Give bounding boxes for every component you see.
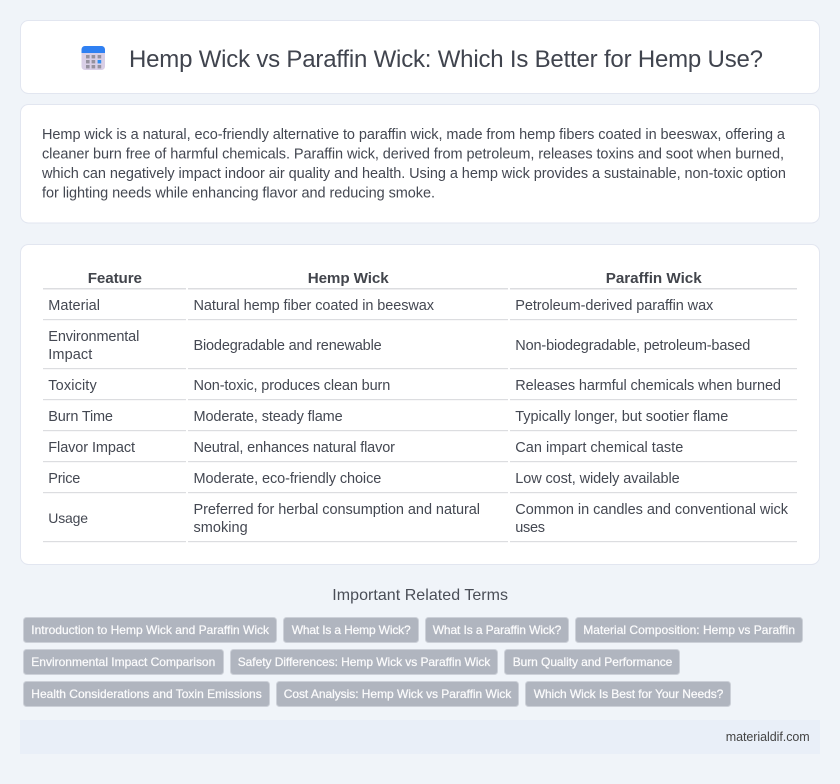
footer bar (20, 720, 820, 754)
row: environmental impact: Biodegradable and renewable (194, 338, 382, 354)
row: material: Natural hemp fiber coated in beeswax (194, 298, 435, 314)
row: burn time: Moderate, steady flame (194, 409, 343, 425)
intro text block: for lighting needs while enhancing flavor and reducing smoke. (42, 186, 435, 202)
icon: calendar (82, 46, 105, 70)
tag: Cost Analysis: Hemp Wick vs Paraffin Wick (284, 687, 512, 701)
row: usage: Preferred for herbal consumption and natural (194, 502, 480, 518)
row: usage: uses (515, 520, 545, 536)
row: flavor impact: Neutral, enhances natural flavor (194, 440, 395, 456)
tag (230, 650, 498, 674)
table header row: Hemp Wick (308, 270, 389, 287)
row: usage: smoking (194, 520, 248, 536)
tag (284, 618, 418, 642)
tag: Material Composition: Hemp vs Paraffin (583, 623, 795, 637)
tag: Safety Differences: Hemp Wick vs Paraffin Wick (238, 655, 491, 669)
table header row (88, 270, 702, 287)
header panel (20, 20, 820, 94)
tag: Which Wick Is Best for Your Needs? (534, 687, 724, 701)
intro text block: which can negatively impact indoor air quality and health. Using a hemp wick provides a sustainable, non-toxic option (41, 166, 786, 182)
tag (24, 682, 270, 706)
table header row: Feature (88, 270, 142, 287)
row: environmental impact: Non-biodegradable, petroleum-based (515, 338, 750, 354)
panel: comparison table (20, 244, 820, 564)
row: material (48, 298, 714, 314)
row: environmental impact: Environmental (48, 329, 139, 345)
tag (24, 618, 276, 642)
row: usage (48, 502, 789, 536)
row: price: Moderate, eco-friendly choice (194, 471, 381, 487)
row: flavor impact: Can impart chemical taste (515, 440, 683, 456)
footer source text: materialdif.com (726, 730, 810, 744)
row: usage: Usage (48, 510, 88, 526)
row: price: Price (48, 471, 80, 487)
tag (504, 650, 680, 674)
row: burn time (48, 409, 728, 425)
row: price (48, 471, 680, 487)
row: burn time: Typically longer, but sootier flame (515, 409, 728, 425)
row: price: Low cost, widely available (515, 471, 680, 487)
table row lines (43, 288, 797, 542)
related term tags (24, 618, 802, 706)
panel: introduction (20, 104, 820, 223)
row: material: Petroleum-derived paraffin wax (515, 298, 714, 314)
row: flavor impact (48, 440, 683, 456)
tag: Environmental Impact Comparison (31, 655, 215, 669)
tag: Introduction to Hemp Wick and Paraffin Wick (31, 623, 270, 637)
tag: Health Considerations and Toxin Emissions (31, 687, 262, 701)
row: toxicity (48, 378, 781, 394)
row: material: Material (48, 298, 100, 314)
row: toxicity: Releases harmful chemicals when burned (515, 378, 781, 394)
row: usage: Common in candles and conventional wick (515, 502, 789, 518)
row: flavor impact: Flavor Impact (48, 440, 135, 456)
tag (276, 682, 518, 706)
row: environmental impact: Impact (48, 347, 92, 363)
row: toxicity: Non-toxic, produces clean burn (194, 378, 390, 394)
intro text block: cleaner burn free of harmful chemicals. Paraffin wick, derived from petroleum, releases toxins and soot when burned, (42, 146, 784, 162)
row: burn time: Burn Time (48, 409, 113, 425)
row: environmental impact (48, 329, 750, 363)
intro text block: Hemp wick is a natural, eco-friendly alternative to paraffin wick, made from hemp fibers coated in beeswax, offering a (42, 127, 786, 143)
heading: important related terms: Important Related Terms (332, 587, 508, 604)
intro text block (41, 127, 786, 202)
tag (526, 682, 730, 706)
tag: What Is a Paraffin Wick? (433, 623, 562, 637)
tag (426, 618, 568, 642)
title: Hemp Wick vs Paraffin Wick: Which Is Better for Hemp Use? (129, 46, 763, 73)
tag: Burn Quality and Performance (513, 655, 673, 669)
tag (24, 650, 224, 674)
row: toxicity: Toxicity (48, 378, 97, 394)
tag: What Is a Hemp Wick? (292, 623, 411, 637)
table header row: Paraffin Wick (606, 270, 702, 287)
tag (576, 618, 802, 642)
